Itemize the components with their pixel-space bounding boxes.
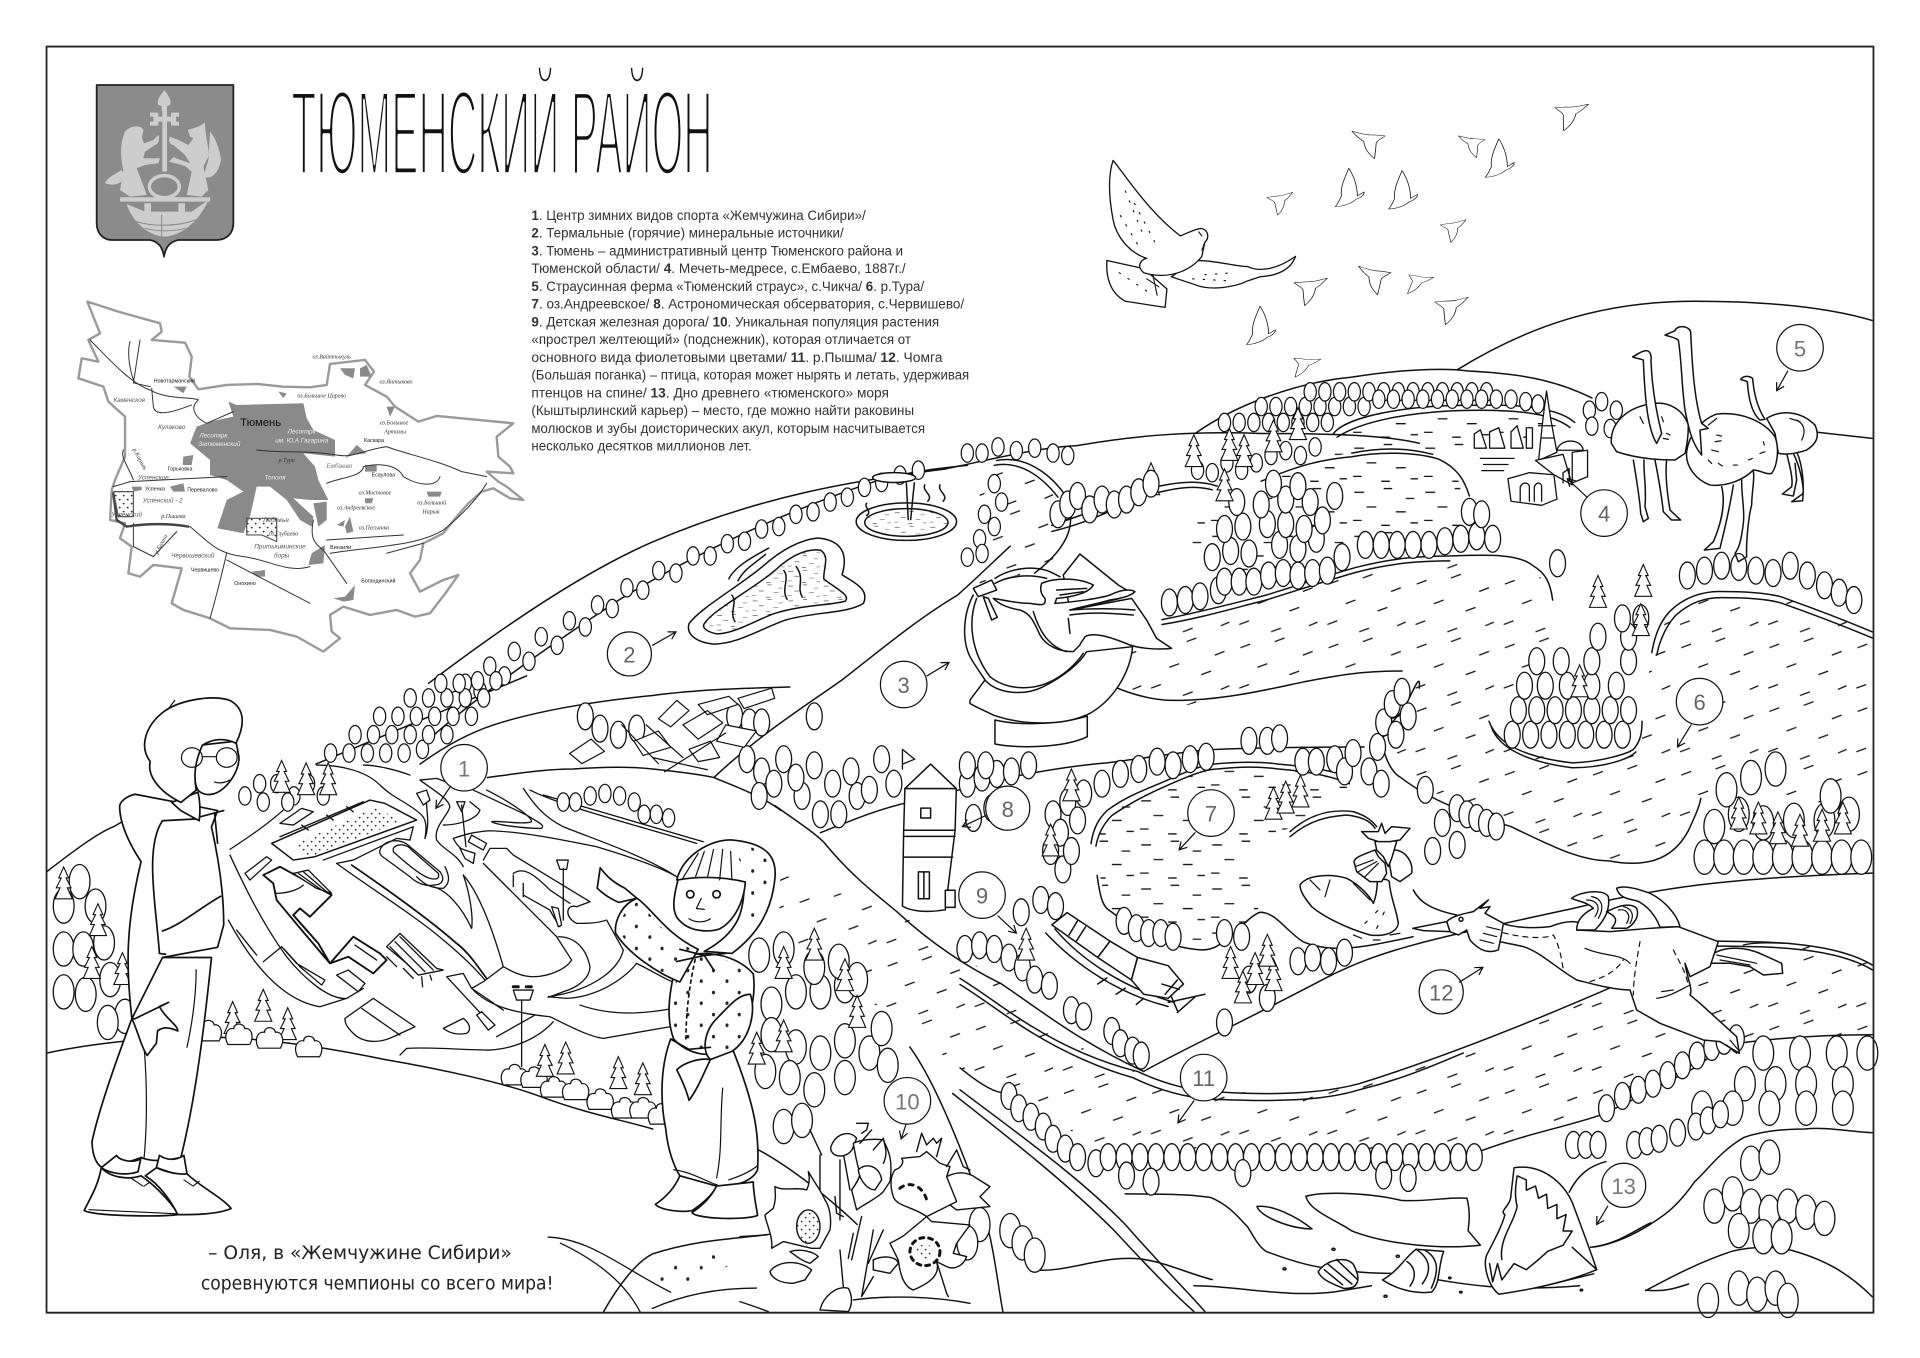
ostrich: left (1611, 351, 1688, 522)
map: place labels: Нарык (421, 509, 440, 515)
marker 11 (1178, 1054, 1227, 1123)
map: place labels: Артамы (383, 430, 406, 436)
map: place labels: оз.Большой (417, 499, 446, 506)
marker 9 (959, 872, 1016, 933)
marker 1: 1 (458, 756, 470, 781)
marker 12: 12 (1429, 980, 1453, 1005)
map: place labels: оз.Вайтпыкуль (312, 354, 351, 361)
marker 7: 7 (1205, 802, 1217, 827)
illustration: rocks and shells (1257, 1193, 1689, 1297)
map: place labels: Перевалово (187, 488, 218, 494)
map: rivers and roads (90, 340, 487, 618)
map: place labels: Новотарманский (154, 378, 195, 385)
marker 5: 5 (1794, 336, 1806, 361)
map: place labels: р.Кармак (131, 447, 148, 472)
illustration: pasque flowers (740, 1123, 990, 1312)
flock of birds (1247, 101, 1588, 381)
ostrich: front (1665, 327, 1777, 562)
map: place labels: р.Пышма (160, 514, 185, 520)
map: place labels: оз.Глубаево (269, 530, 298, 537)
coat of arms (97, 85, 233, 257)
illustration: stony ground (548, 1237, 756, 1312)
legend text block: «прострел желтеющий» (подснежник), которая отличается от (531, 332, 911, 347)
legend text block: птенцов на спине/ 13. Дно древнего «тюменского» моря (531, 385, 889, 400)
caption: handwritten speech: соревнуются чемпионы со всего мира! (201, 1273, 553, 1294)
map: place labels: Успенский (110, 511, 143, 519)
marker 6: 6 (1693, 690, 1706, 715)
marker 4 (1567, 479, 1627, 536)
illustration: observatory tower (902, 749, 956, 911)
map of Tyumen district (78, 302, 523, 652)
illustration: village houses (570, 688, 775, 772)
legend text block: Тюменской области/ 4. Мечеть-медресе, с.Ембаево, 1887г./ (531, 261, 906, 276)
map: place labels: Тополя (265, 474, 286, 481)
marker 7 (1179, 790, 1234, 850)
legend text block: 7. оз.Андреевское/ 8. Астрономическая обсерватория, с.Червишево/ (531, 297, 964, 312)
map: place labels: р.Бахта (154, 534, 169, 556)
map: place labels: Винзили (330, 545, 351, 551)
map: place labels: Успенское (137, 474, 169, 481)
legend text block: 5. Страусинная ферма «Тюменский страус», с.Чикча/ 6. р.Тура/ (531, 279, 924, 294)
marker 9: 9 (976, 884, 988, 909)
ostrich: back (1741, 376, 1817, 502)
marker 13: 13 (1611, 1174, 1636, 1199)
panel: forest tree clusters (64, 392, 1867, 1300)
map: place labels: Ембаево (326, 462, 353, 470)
illustration: Tyumen monument with flying figure (965, 554, 1172, 747)
legend text block: 3. Тюмень – административный центр Тюменского района и (531, 243, 903, 258)
panel: ski complex Pearl of Siberia (228, 765, 703, 1067)
illustration: children's railway train (1046, 913, 1205, 1013)
marker 2 (607, 632, 676, 676)
illustration: mosque Embaevo (1474, 391, 1588, 505)
illustration: prehistoric shark jaw (1485, 1162, 1651, 1294)
marker 6 (1676, 678, 1723, 747)
map: place labels (110, 354, 446, 587)
marker 1 (436, 745, 487, 808)
legend text block: 1. Центр зимних видов спорта «Жемчужина Сибири»/ (531, 208, 866, 223)
map: place labels: им. Ю.А Гагарина (275, 438, 329, 445)
map: place labels: оз.Янтыково (379, 379, 413, 385)
legend text block: основного вида фиолетовыми цветами/ 11. р.Пышма/ 12. Чомга (531, 350, 943, 365)
map: place labels: Лесопарк (287, 429, 317, 436)
map: place labels: Каскара (364, 438, 384, 444)
illustration: great crested grebe on lake and flying grebe (1290, 811, 1790, 1053)
map: district outline (78, 302, 523, 652)
legend text block: 9. Детская железная дорога/ 10. Уникальная популяция растения (531, 314, 939, 329)
map: place labels: Притышминские (254, 544, 306, 551)
marker 12 (1419, 967, 1483, 1014)
legend text block: молюсков и зубы доисторических акул, которым насчитывается (531, 421, 925, 436)
map: place labels: оз.Большое Царево (297, 394, 346, 400)
figure: girl Olya pointing (597, 840, 775, 1218)
map: place labels: боры (274, 552, 290, 560)
map: place labels: Богандинский (361, 577, 395, 584)
flying grebe with chicks (1413, 887, 1790, 1053)
marker 3 (880, 661, 949, 708)
marker 3: 3 (898, 673, 910, 698)
marker 4: 4 (1598, 502, 1610, 527)
text: ТЮМЕНСКИЙ РАЙОН (291, 65, 713, 201)
numbered markers (436, 325, 1823, 1225)
marker 5 (1777, 325, 1823, 391)
panel: landscape dashed water (775, 411, 1872, 1169)
map: place labels: Успенский - 2 (142, 497, 183, 505)
marker 11: 11 (1192, 1066, 1215, 1091)
caption: handwritten speech (201, 1243, 553, 1294)
map: place labels: Кулаково (158, 424, 186, 431)
map: place labels: Успенка (145, 487, 165, 493)
illustration: thermal pool (688, 538, 865, 644)
map: place labels: Каменское (113, 397, 146, 404)
shell: clam (1318, 1260, 1358, 1288)
legend text block: 2. Термальные (горячие) минеральные источники/ (531, 226, 844, 241)
marker 2: 2 (623, 642, 636, 667)
map: place labels: Тюмень (240, 417, 281, 429)
panel: hills and river lines (47, 301, 1873, 1311)
map: place labels: Онохино (234, 581, 256, 587)
marker 10 (884, 1078, 931, 1139)
illustration: thermal fountain (856, 473, 957, 540)
map: place labels: р.Тура (278, 458, 295, 464)
map: place labels: Есаулова (372, 473, 395, 479)
map: Tyumen city and settlements (132, 365, 442, 602)
marker 10: 10 (895, 1089, 920, 1114)
map: place labels: Лесопарк (198, 432, 228, 439)
map: place labels: оз.Андреевское (337, 505, 375, 512)
map: place labels: оз.Песьянка (359, 525, 389, 531)
map: place labels: оз.Мостовое (359, 491, 392, 497)
legend text block: несколько десятков миллионов лет. (531, 439, 752, 454)
legend text block (531, 208, 969, 454)
caption: handwritten speech: – Оля, в «Жемчужине Сибири» (208, 1243, 512, 1264)
map: place labels: Червишево (191, 568, 219, 574)
figure: boy with glasses (84, 698, 242, 1216)
marker 8: 8 (1002, 797, 1014, 822)
legend text block: (Большая поганка) – птица, которая может нырять и летать, удерживая (531, 368, 969, 383)
illustration: ostriches (1611, 327, 1817, 562)
map: place labels: Лебяжье (262, 516, 289, 524)
map: place labels: Горьковка (168, 467, 192, 473)
legend text block: (Кыштырлинский карьер) – место, где можно найти раковины (531, 403, 914, 418)
map: place labels: оз.Большое (380, 421, 409, 427)
map: place labels: Затюменский (198, 440, 241, 448)
marker 8 (962, 786, 1030, 830)
marker 13 (1597, 1163, 1646, 1225)
grebe on lake (1290, 811, 1457, 940)
map: place labels: Червишевский (171, 552, 215, 560)
shell: conch (1382, 1249, 1444, 1293)
dove carrying letter (1107, 160, 1296, 307)
